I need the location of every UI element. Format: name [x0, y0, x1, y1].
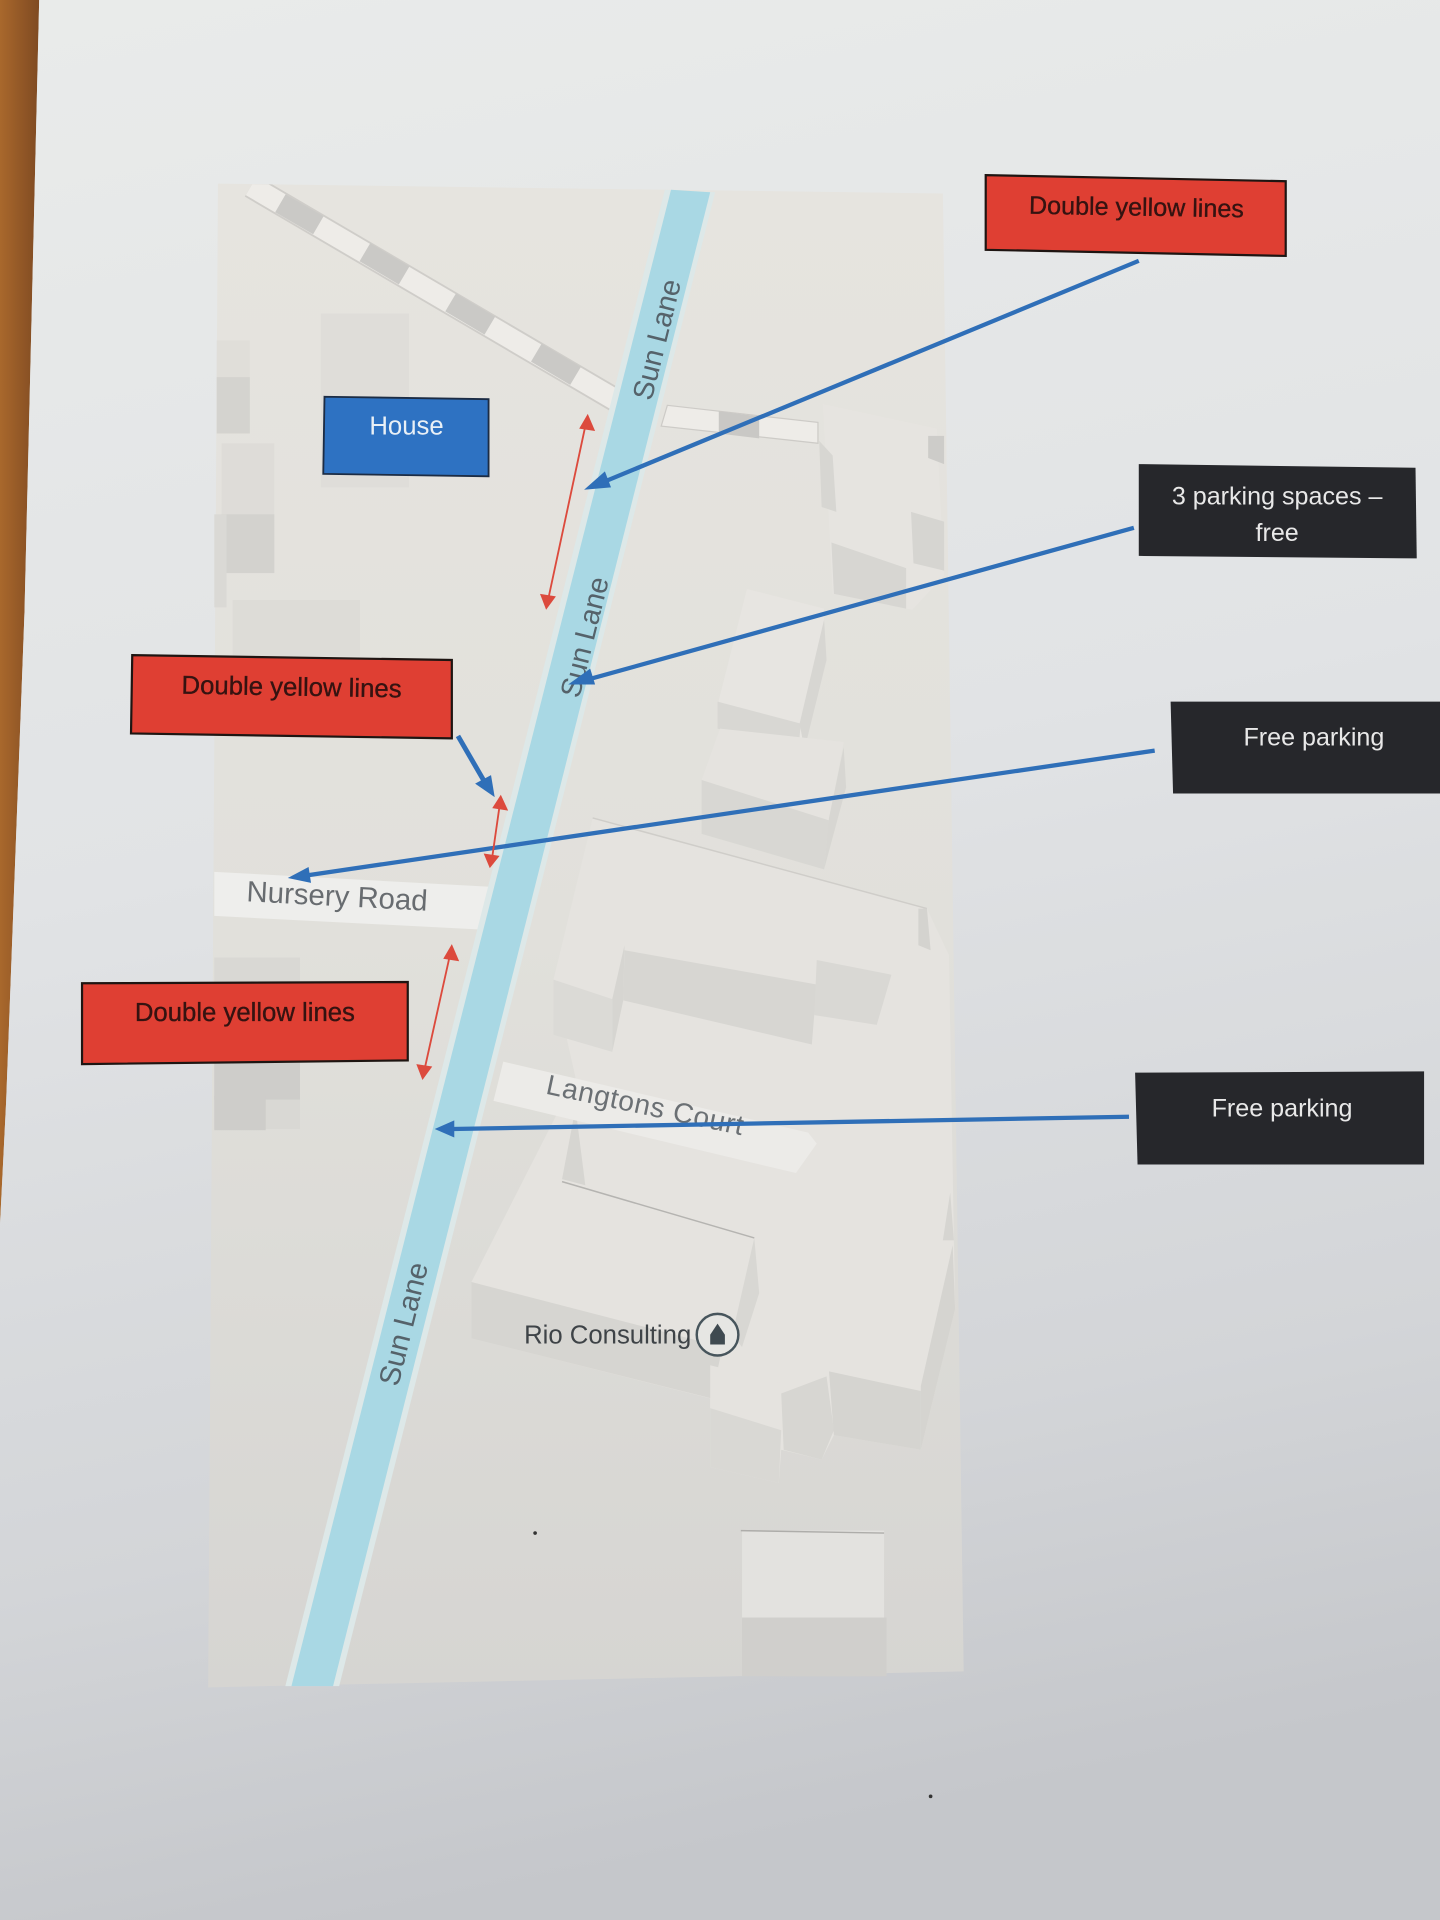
red extent arrow middle — [484, 795, 508, 868]
buildings: left column — [214, 313, 409, 1130]
arrow: free parking to road lower — [435, 1117, 1129, 1138]
wooden table edge — [0, 0, 39, 1224]
icon: place marker — [697, 1314, 738, 1356]
place label: Rio Consulting: Rio Consulting — [524, 1321, 691, 1349]
arrow: 3 parking spaces to road — [568, 528, 1134, 684]
callout: double yellow lines left upper — [131, 655, 452, 738]
arrow: double yellow lines left to road — [458, 736, 495, 797]
Nursery Road — [214, 872, 508, 931]
label: House: House — [369, 413, 444, 441]
speck — [533, 1531, 537, 1535]
red extent arrow lower — [416, 944, 459, 1080]
callout: double yellow lines top right: Double yellow lines — [1029, 192, 1244, 223]
building bottom right — [741, 1531, 887, 1676]
callout: 3 parking spaces free: 3 parking spaces – — [1172, 482, 1383, 510]
buildings: central block — [471, 818, 955, 1483]
road label: Langtons Court: Langtons Court — [544, 1069, 747, 1141]
callout: free parking upper: Free parking — [1243, 724, 1384, 752]
map background — [208, 184, 964, 1687]
buildings: upper right — [702, 404, 944, 869]
callout: double yellow lines top right — [986, 175, 1286, 256]
red extent arrow top — [540, 414, 595, 610]
Sun Lane road — [285, 190, 715, 1686]
callout: free parking lower — [1135, 1071, 1424, 1164]
road label: Sun Lane middle: Sun Lane — [555, 574, 616, 701]
callout: double yellow lines left lower — [82, 982, 408, 1064]
callout: free parking upper — [1171, 702, 1440, 793]
callout: double yellow lines left upper: Double yellow lines — [181, 672, 402, 703]
arrow: free parking to Nursery Road — [288, 751, 1155, 883]
road label: Sun Lane top: Sun Lane — [627, 276, 688, 403]
callout: 3 parking spaces free: free — [1256, 519, 1299, 547]
label: House — [323, 397, 489, 476]
callout: 3 parking spaces free — [1139, 464, 1417, 558]
arrow: double yellow lines to road top — [584, 261, 1139, 490]
footpath top left — [251, 186, 618, 402]
panel: map — [208, 184, 964, 1687]
speck on paper — [929, 1794, 932, 1798]
callout: free parking lower: Free parking — [1212, 1095, 1352, 1123]
callout: double yellow lines left lower: Double yellow lines — [135, 999, 355, 1027]
road label: Sun Lane bottom: Sun Lane — [373, 1259, 435, 1389]
Langtons Court — [493, 1062, 817, 1173]
road label: Nursery Road: Nursery Road — [246, 875, 428, 918]
footpath right of road — [661, 405, 818, 443]
